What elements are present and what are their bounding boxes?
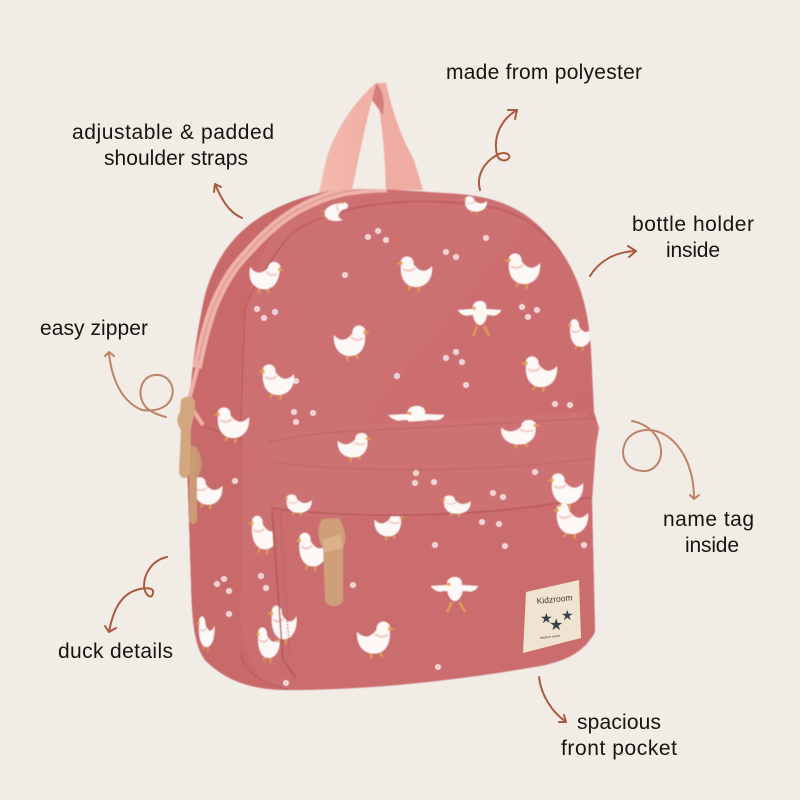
label: front pocket [561, 711, 677, 760]
infographic canvas [40, 64, 754, 760]
label: bottle holder [632, 213, 754, 262]
label: front pocket: spacious [577, 711, 661, 734]
backpack illustration [170, 83, 599, 700]
side pocket [235, 438, 240, 651]
side zipper pulls [177, 362, 203, 524]
brand label [523, 580, 581, 653]
zipper track [197, 188, 387, 368]
label: made from polyester: made from polyester [446, 61, 642, 84]
label: easy zipper: easy zipper [40, 317, 148, 340]
arrow: duck details [105, 557, 167, 632]
front zipper pull [318, 518, 345, 606]
label: bottle holder: bottle holder [632, 213, 754, 236]
label: shoulder straps: adjustable & padded [72, 121, 274, 144]
arrow: bottle holder [590, 246, 636, 276]
brand label: ★ [549, 615, 563, 634]
arrow: front pocket [539, 677, 566, 722]
carry handle [319, 83, 423, 193]
front panel seam [245, 201, 570, 310]
arrow: easy zipper [105, 352, 173, 417]
print on upper panel [190, 196, 592, 509]
arrow: polyester [479, 110, 517, 190]
bag body [187, 189, 599, 690]
brand label: Kidzroom [536, 592, 573, 606]
front pocket [268, 412, 599, 688]
side gusset [191, 196, 310, 690]
label: name tag: inside [685, 534, 739, 557]
label: shoulder straps: shoulder straps [104, 147, 248, 170]
arrow: shoulder straps [214, 184, 242, 218]
label: name tag [663, 508, 754, 557]
brand label: ★ [540, 611, 553, 627]
brand label: ★ [561, 608, 574, 624]
side and low print [196, 516, 280, 663]
label: shoulder straps [72, 121, 274, 170]
label: front pocket: front pocket [561, 737, 677, 760]
label: bottle holder: inside [666, 239, 720, 262]
arrow: name tag [623, 421, 699, 499]
brand label: explore more [540, 634, 560, 640]
label: duck details: duck details [58, 640, 173, 663]
label: name tag: name tag [663, 508, 754, 531]
